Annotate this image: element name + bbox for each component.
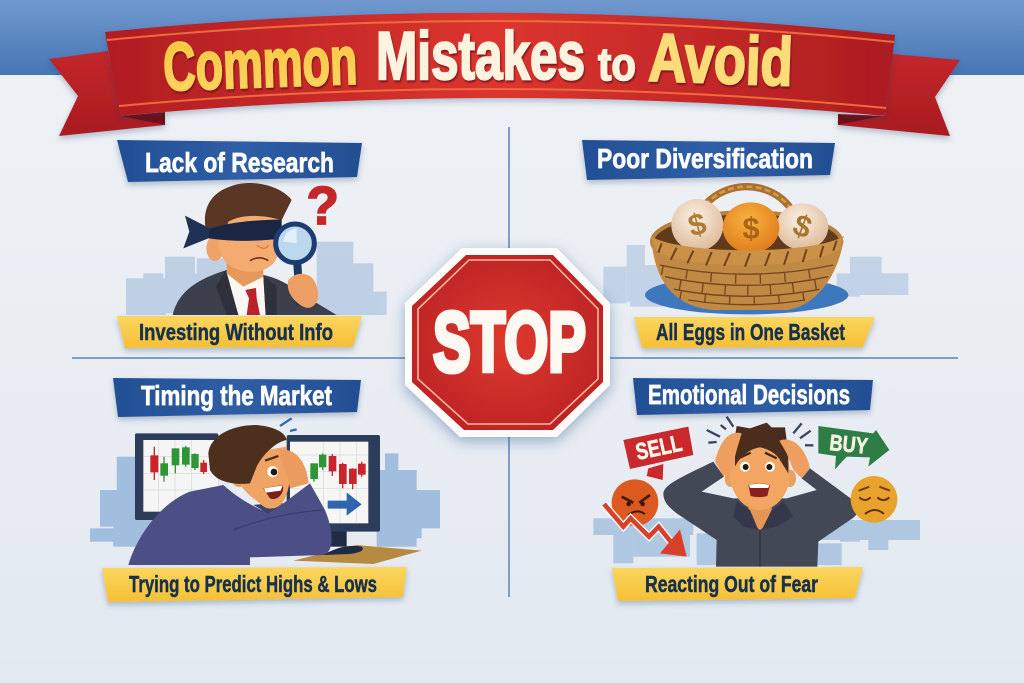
hair	[735, 423, 788, 473]
angry emoji	[612, 479, 658, 526]
egg: center	[723, 202, 779, 253]
panel: emotional decisions	[593, 378, 920, 601]
shirt	[663, 462, 859, 567]
basket front rim	[651, 236, 844, 265]
stress marks	[707, 417, 813, 445]
falling arrow	[604, 504, 687, 557]
blue header band	[0, 0, 1024, 75]
arrow on screen	[328, 492, 362, 516]
sell sign	[623, 427, 693, 480]
title text	[162, 18, 794, 105]
caption banner: All Eggs in One Basket	[656, 319, 845, 345]
hair	[205, 183, 292, 237]
heading banner	[633, 378, 873, 415]
hair	[208, 425, 287, 484]
candlesticks right	[311, 453, 365, 489]
magnifying glass	[276, 224, 314, 305]
title text: Mistakes	[376, 18, 585, 94]
egg: right: $	[789, 208, 816, 246]
title text: Common	[162, 23, 358, 105]
illustration: stressed trader at monitors	[90, 418, 440, 565]
skyline backdrop	[603, 245, 908, 307]
caption banner: Investing Without Info	[139, 319, 333, 345]
panel: lack of research	[117, 140, 387, 348]
heading banner	[582, 140, 835, 180]
question mark: ?	[306, 177, 339, 236]
skyline backdrop	[126, 242, 387, 315]
basket body	[652, 242, 843, 310]
skyline backdrop	[90, 453, 440, 547]
title text: to	[598, 38, 636, 90]
neck and collar	[748, 507, 772, 530]
caption banner: Reacting Out of Fear	[645, 571, 818, 597]
sweat marks	[280, 418, 297, 431]
neck and face	[227, 257, 263, 287]
hand	[288, 274, 318, 308]
heading banner: Emotional Decisions	[648, 379, 850, 410]
caption banner	[117, 316, 362, 348]
illustration: panicking investor	[593, 417, 920, 567]
ears	[725, 470, 737, 487]
suit	[173, 270, 337, 315]
buy sign	[818, 426, 889, 469]
basket weave	[660, 265, 833, 305]
egg: right	[776, 203, 828, 250]
open mouth	[263, 485, 283, 499]
stop sign	[405, 248, 610, 437]
heading banner: Lack of Research	[145, 147, 334, 178]
basket shadow	[645, 276, 848, 314]
sell sign: SELL	[633, 430, 684, 465]
buy sign: BUY	[828, 429, 869, 459]
monitor left	[135, 433, 218, 520]
hand on forehead	[279, 450, 309, 488]
monitor right	[287, 435, 380, 555]
eyes	[740, 462, 750, 472]
panel: timing the market	[90, 378, 440, 602]
caption banner	[634, 317, 875, 348]
egg: left	[671, 199, 723, 251]
caption banner	[612, 567, 863, 601]
candlesticks left	[151, 446, 206, 482]
trader jacket	[128, 483, 332, 565]
caption banner: Trying to Predict Highs & Lows	[129, 571, 377, 597]
heading banner: Poor Diversification	[597, 143, 813, 174]
basket back rim	[652, 212, 841, 271]
face	[231, 463, 248, 487]
illustration: eggs in basket	[603, 187, 908, 314]
heading banner: Timing the Market	[141, 380, 332, 411]
title text: Avoid	[648, 20, 794, 101]
eye and brow	[267, 466, 278, 477]
mouth	[748, 483, 770, 497]
desk	[293, 545, 422, 564]
ribbon tail: left	[49, 51, 165, 136]
heading banner	[113, 378, 361, 417]
sad emoji	[851, 476, 897, 523]
title ribbon	[49, 13, 960, 136]
ribbon body	[105, 13, 895, 116]
heading banner	[117, 140, 362, 182]
skyline backdrop	[593, 518, 920, 565]
egg: center: $	[742, 211, 760, 245]
blindfold	[207, 219, 282, 241]
illustration: blindfolded investor	[126, 177, 387, 315]
hands on head	[715, 433, 742, 476]
caption banner	[102, 567, 407, 602]
brows	[738, 453, 777, 458]
ribbon tail: right	[838, 54, 960, 136]
egg: left: $	[685, 206, 710, 244]
head	[730, 437, 790, 510]
shirt and tie	[226, 272, 266, 315]
stop text: STOP	[433, 295, 586, 389]
frown	[250, 258, 268, 261]
basket handle	[705, 187, 791, 208]
quadrant divider lines	[72, 127, 958, 597]
panel: poor diversification	[582, 140, 908, 348]
